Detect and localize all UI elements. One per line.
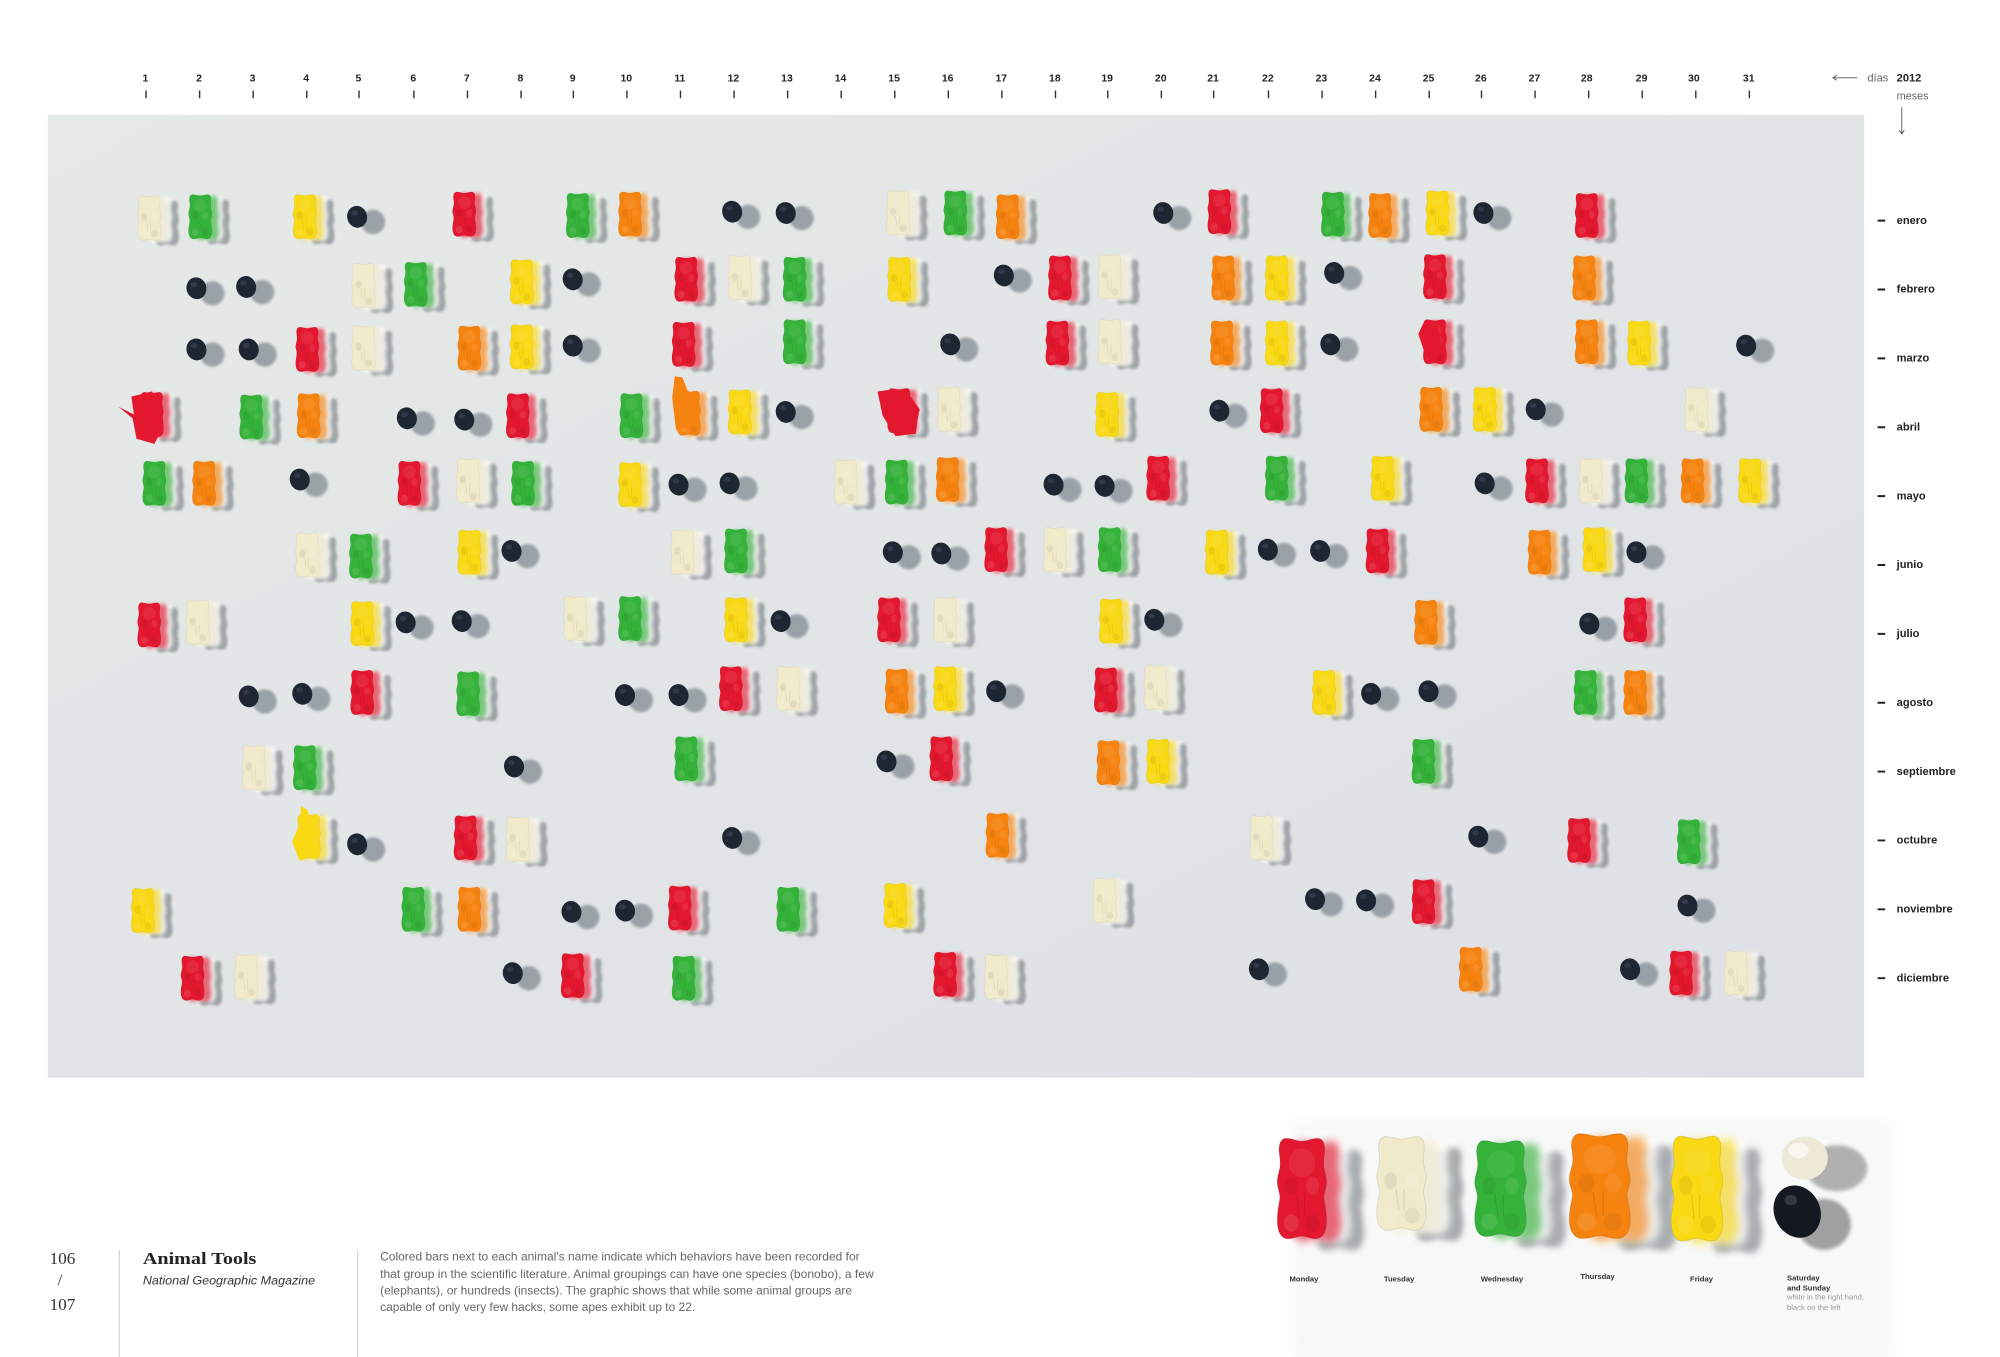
row: febrero — [184, 254, 1614, 313]
row: agosto — [236, 665, 1665, 721]
row: mayo — [143, 456, 1780, 512]
panel: legend photo — [1277, 1120, 1893, 1357]
axis: day numbers: 29 — [1636, 74, 1648, 85]
row: diciembre — [181, 947, 1766, 1006]
axis: day numbers: 18 — [1049, 74, 1061, 85]
axis: day numbers: 7 — [464, 74, 470, 85]
legend labels — [1290, 1272, 1864, 1312]
axis: day numbers: 1 — [143, 74, 149, 85]
body text: that group in the scientific literature. Animal groupings can have one species (bonobo), a few — [380, 1267, 874, 1281]
axis: month labels — [1878, 215, 1956, 984]
axis: day numbers: 24 — [1369, 74, 1381, 85]
panel: gummy bear calendar photo — [48, 115, 1864, 1078]
legend labels: white in the right hand, — [1786, 1293, 1864, 1302]
axis key: dias, 2012, meses with arrows — [1833, 73, 1929, 134]
axis: day numbers: 4 — [303, 74, 309, 85]
body text: Colored bars next to each animal's name indicate which behaviors have been recorded for — [380, 1250, 860, 1264]
axis: day numbers: 11 — [674, 74, 686, 85]
body text: capable of only very few hacks, some apes exhibit up to 22. — [380, 1300, 695, 1314]
axis: day numbers: 2 — [196, 74, 202, 85]
axis: day numbers: 12 — [728, 74, 739, 85]
axis: month labels: agosto — [1897, 697, 1933, 709]
axis: day numbers: 17 — [995, 74, 1007, 85]
page numbers: 106 — [50, 1249, 76, 1268]
row: junio — [296, 527, 1665, 583]
legend jelly bean: black — [1765, 1178, 1851, 1250]
axis: day numbers: 19 — [1101, 74, 1113, 85]
legend labels: black on the left — [1787, 1303, 1841, 1312]
row: septiembre — [242, 737, 1453, 795]
legend bear: Tuesday white — [1377, 1137, 1464, 1241]
page numbers — [50, 1249, 76, 1314]
axis key: dias, 2012, meses with arrows: meses — [1897, 90, 1929, 102]
row: abril — [119, 376, 1726, 444]
page numbers: / — [58, 1271, 63, 1290]
axis: day numbers: 14 — [835, 74, 847, 85]
axis: day numbers: 23 — [1316, 74, 1327, 85]
axis: month labels: enero — [1897, 215, 1927, 227]
legend bear: Wednesday green — [1475, 1141, 1566, 1248]
legend labels: Monday — [1290, 1275, 1319, 1284]
legend labels: Thursday — [1580, 1272, 1615, 1281]
legend labels: Wednesday — [1481, 1275, 1524, 1284]
axis: day numbers: 8 — [518, 74, 524, 85]
axis: day numbers: 13 — [781, 74, 793, 85]
axis: month labels: septiembre — [1897, 766, 1956, 778]
axis: month labels: febrero — [1897, 284, 1935, 296]
axis: month labels: marzo — [1897, 353, 1930, 365]
axis: day numbers: 15 — [888, 74, 900, 85]
axis: day numbers: 22 — [1262, 74, 1274, 85]
axis key: dias, 2012, meses with arrows: días — [1867, 73, 1889, 85]
axis: day numbers: 31 — [1743, 74, 1755, 85]
axis key: dias, 2012, meses with arrows: 2012 — [1897, 73, 1921, 85]
axis: day numbers — [143, 74, 1755, 98]
axis: day numbers: 16 — [942, 74, 954, 85]
axis: day numbers: 27 — [1529, 74, 1540, 85]
legend labels: Tuesday — [1384, 1275, 1415, 1284]
axis: day numbers: 21 — [1207, 74, 1219, 85]
axis: month labels: diciembre — [1897, 972, 1949, 984]
axis: day numbers: 3 — [250, 74, 256, 85]
row: octubre — [292, 806, 1718, 869]
title block — [143, 1249, 315, 1287]
legend bear: Friday yellow — [1671, 1136, 1762, 1253]
legend bear: Thursday orange — [1569, 1134, 1677, 1250]
page numbers: 107 — [50, 1295, 76, 1314]
legend labels: Saturday — [1787, 1273, 1820, 1282]
body text — [380, 1250, 874, 1314]
axis: day numbers: 9 — [570, 74, 576, 85]
axis: month labels: abril — [1897, 421, 1920, 433]
title block: National Geographic Magazine — [143, 1273, 315, 1287]
axis: day numbers: 5 — [356, 74, 362, 85]
axis: day numbers: 30 — [1688, 74, 1700, 85]
legend labels: Friday — [1690, 1275, 1714, 1284]
axis: month labels: julio — [1896, 628, 1920, 640]
axis: day numbers: 28 — [1581, 74, 1593, 85]
legend jelly bean: white — [1782, 1136, 1867, 1191]
axis: day numbers: 25 — [1423, 74, 1435, 85]
row: enero — [138, 189, 1616, 245]
axis: month labels: octubre — [1897, 835, 1937, 847]
axis: month labels: noviembre — [1897, 904, 1953, 916]
axis: month labels: junio — [1896, 559, 1923, 571]
legend labels: and Sunday — [1787, 1284, 1831, 1293]
row: noviembre — [131, 878, 1716, 938]
legend bear: Monday red — [1277, 1138, 1364, 1250]
axis: day numbers: 6 — [410, 74, 416, 85]
row: julio — [138, 596, 1665, 652]
axis: day numbers: 10 — [620, 74, 632, 85]
row: marzo — [184, 319, 1774, 377]
title block: Animal Tools — [143, 1249, 257, 1268]
axis: month labels: mayo — [1897, 490, 1926, 502]
axis: day numbers: 26 — [1475, 74, 1487, 85]
axis: day numbers: 20 — [1155, 74, 1167, 85]
body text: (elephants), or hundreds (insects). The graphic shows that while some animal groups are — [380, 1284, 852, 1298]
